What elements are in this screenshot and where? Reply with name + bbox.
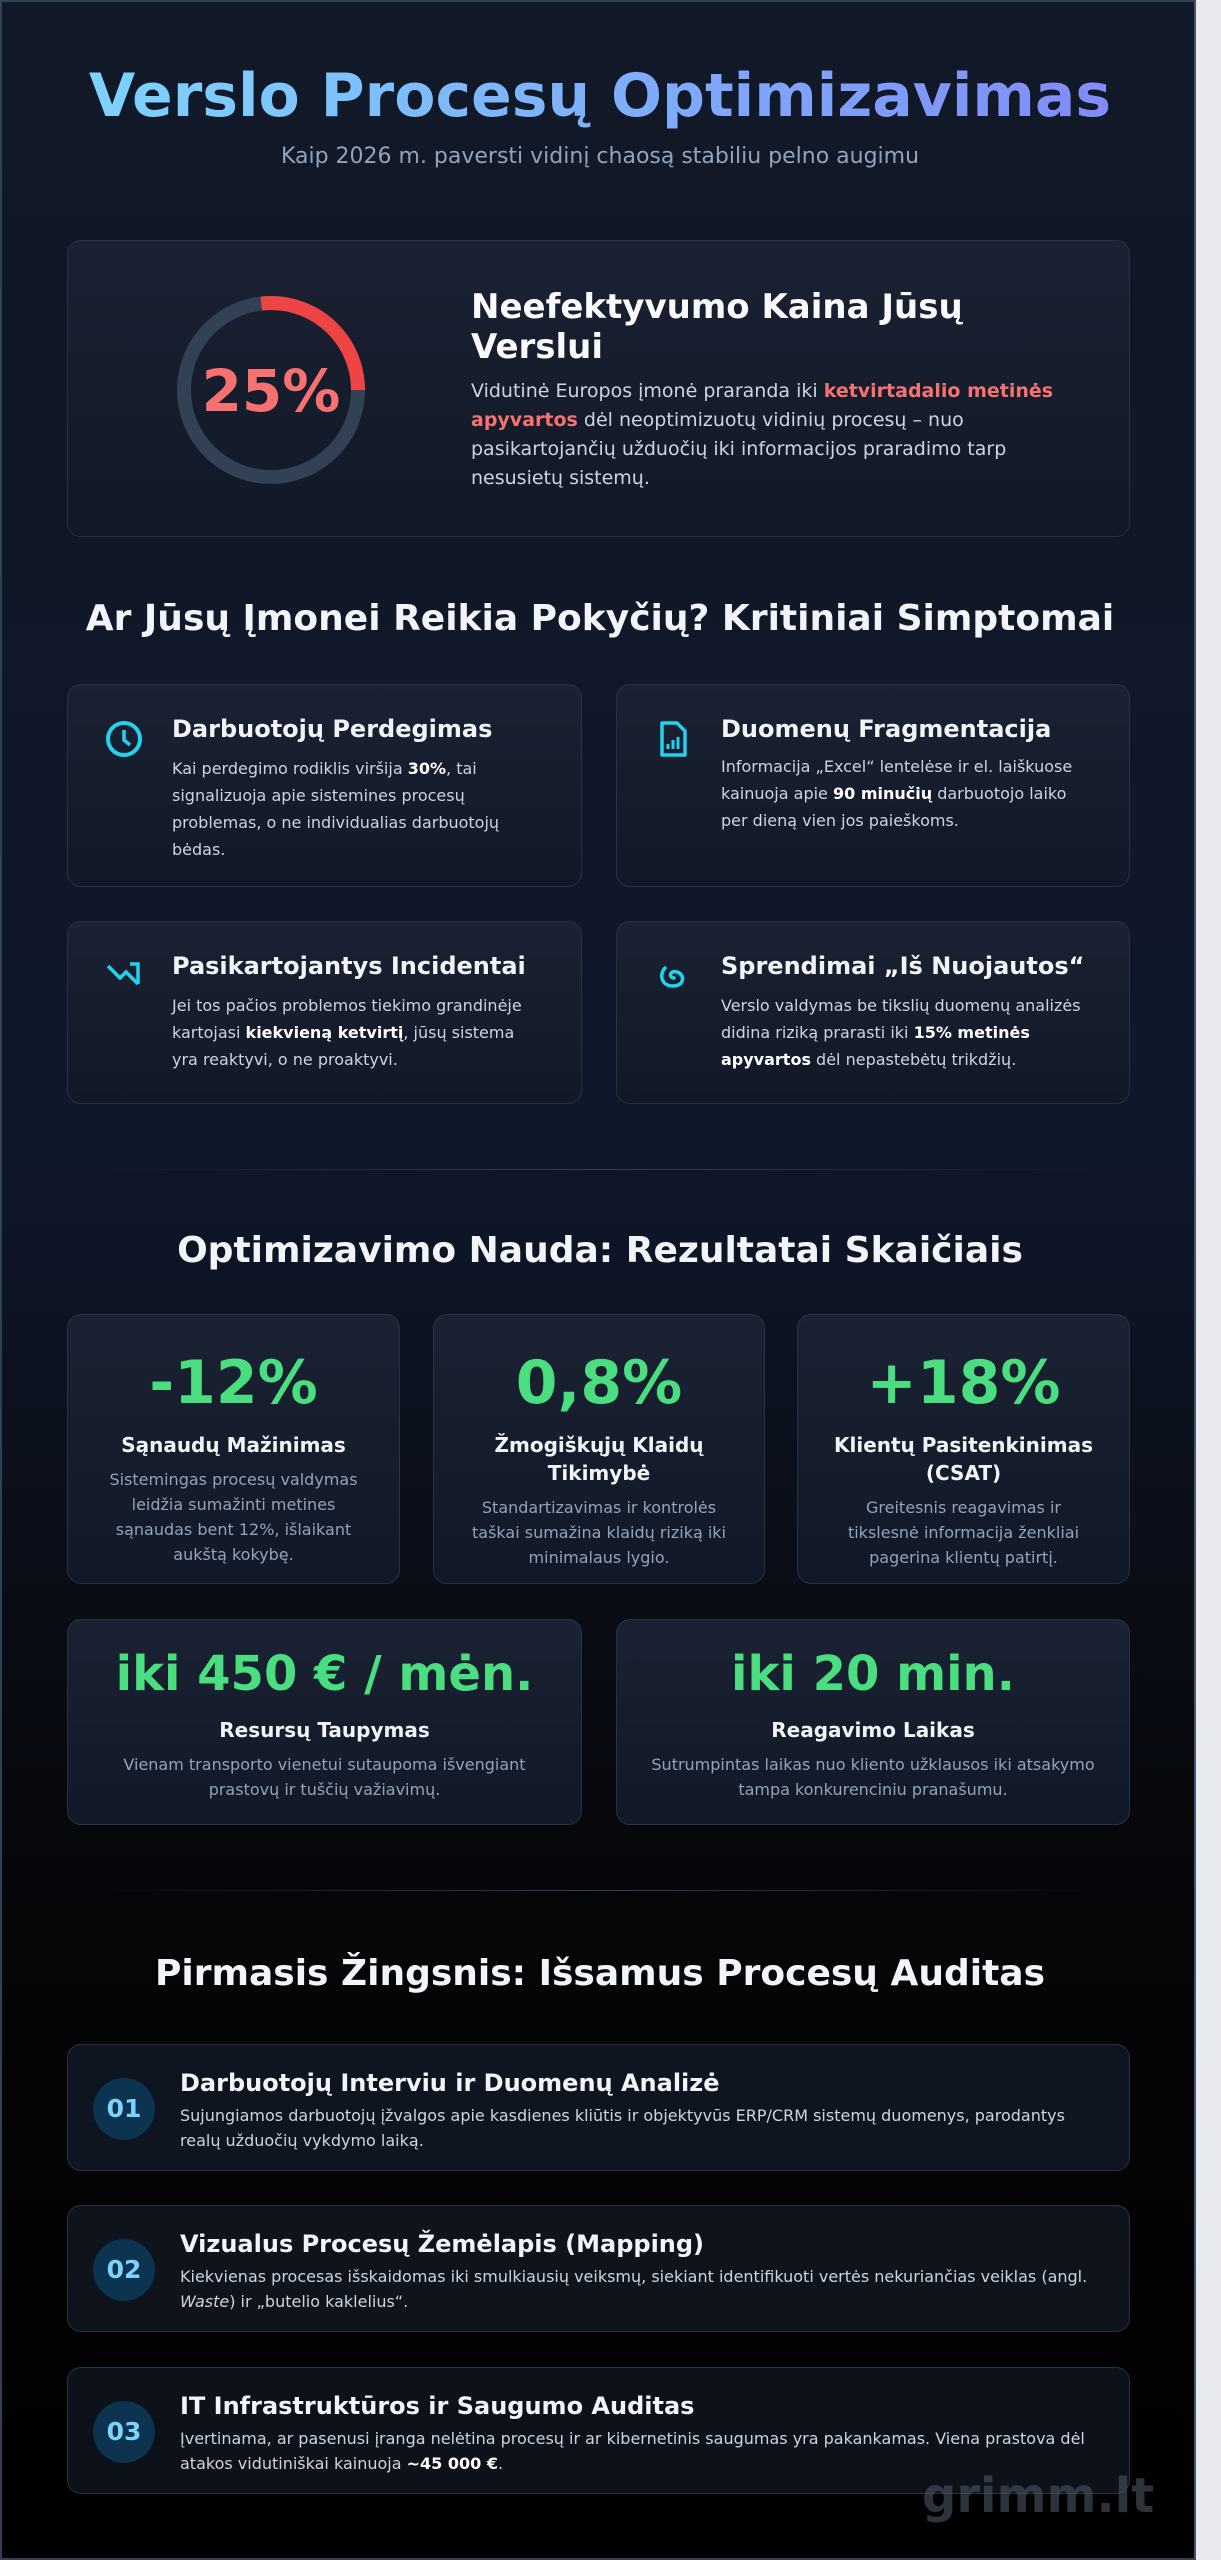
panel: data fragmentation: Duomenų Fragmentacija bbox=[721, 715, 1051, 743]
stat: errors: 0,8% bbox=[516, 1348, 682, 1418]
icon: trend down bbox=[106, 962, 140, 986]
panel: data fragmentation: Informacija „Excel“ lentelėse ir el. laiškuose kainuoja apie 90 minučių darbuotojo laiko per dieną vien jos paieškoms. bbox=[721, 757, 1072, 830]
step 03 bbox=[67, 2367, 1130, 2494]
stat: costs bbox=[67, 1314, 400, 1584]
text: Vidutinė Europos įmonė praranda iki ketvirtadalio metinės apyvartos dėl neoptimizuotų vidinių procesų – nuo pasikartojančių užduočių iki informacijos praradimo tarp nesusietų sistemų. bbox=[471, 380, 1053, 489]
step 01: 01 bbox=[107, 2094, 141, 2123]
heading: benefits: Optimizavimo Nauda: Rezultatai Skaičiais bbox=[177, 1230, 1023, 1271]
stat: resources bbox=[67, 1619, 582, 1825]
stat: CSAT: +18% bbox=[867, 1348, 1060, 1418]
stat: resources: Resursų Taupymas bbox=[219, 1718, 430, 1742]
step 02 bbox=[67, 2205, 1130, 2332]
panel: gut decisions: Verslo valdymas be tikslių duomenų analizės didina riziką prarasti iki 15% metinės apyvartos dėl nepastebėtų trikdžių. bbox=[721, 996, 1081, 1069]
panel: cost of inefficiency bbox=[67, 240, 1130, 537]
stat: response time: Sutrumpintas laikas nuo kliento užklausos iki atsakymo tampa konkurenciniu pranašumu. bbox=[651, 1755, 1095, 1799]
icon: spiral bbox=[660, 966, 684, 988]
stat: costs: Sistemingas procesų valdymas leidžia sumažinti metines sąnaudas bent 12%, išlaikant aukštą kokybę. bbox=[109, 1470, 358, 1564]
stat: errors: Žmogiškųjų Klaidų Tikimybė bbox=[494, 1433, 704, 1485]
panel: data fragmentation bbox=[616, 684, 1130, 887]
stat: errors: Standartizavimas ir kontrolės taškai sumažina klaidų riziką iki minimalaus lygio. bbox=[472, 1498, 726, 1567]
stat: CSAT: Greitesnis reagavimas ir tikslesnė informacija ženkliai pagerina klientų patirtį. bbox=[848, 1498, 1079, 1567]
step 02: 02 bbox=[107, 2255, 141, 2284]
step 03: 03 bbox=[107, 2417, 141, 2446]
stat: response time: iki 20 min. bbox=[731, 1646, 1015, 1702]
ring chart 25% bbox=[177, 296, 365, 484]
step 03: Įvertinama, ar pasenusi įranga nelėtina procesų ir ar kibernetinis saugumas yra pakankamas. Viena prastova dėl atakos vidutiniškai kainuoja ~45 000 €. bbox=[180, 2429, 1085, 2473]
step 03: IT Infrastruktūros ir Saugumo Auditas bbox=[180, 2392, 694, 2420]
stat: resources: iki 450 € / mėn. bbox=[116, 1646, 533, 1702]
step 01: Sujungiamos darbuotojų įžvalgos apie kasdienes kliūtis ir objektyvūs ERP/CRM sistemų duomenys, parodantys realų užduočių vykdymo laiką. bbox=[180, 2106, 1065, 2150]
panel: gut decisions bbox=[616, 921, 1130, 1104]
icon: clock bbox=[106, 721, 142, 757]
subtitle: Kaip 2026 m. paversti vidinį chaosą stabiliu pelno augimu bbox=[281, 144, 919, 169]
panel: recurring incidents: Jei tos pačios problemos tiekimo grandinėje kartojasi kiekvieną ketvirtį, jūsų sistema yra reaktyvi, o ne proaktyvi. bbox=[172, 996, 522, 1069]
step 01 bbox=[67, 2044, 1130, 2171]
stat: costs: Sąnaudų Mažinimas bbox=[121, 1433, 346, 1457]
stat: errors bbox=[433, 1314, 765, 1584]
panel: burnout: Kai perdegimo rodiklis viršija 30%, tai signalizuoja apie sistemines procesų problemas, o ne individualias darbuotojų bėdas. bbox=[172, 759, 499, 859]
panel: gut decisions: Sprendimai „Iš Nuojautos“ bbox=[721, 952, 1084, 980]
heading: Neefektyvumo Kaina Jūsų Verslui bbox=[471, 287, 963, 367]
stat: response time: Reagavimo Laikas bbox=[771, 1718, 975, 1742]
panel: recurring incidents: Pasikartojantys Incidentai bbox=[172, 952, 526, 980]
watermark: grimm.lt bbox=[922, 2468, 1154, 2524]
stat: CSAT bbox=[797, 1314, 1130, 1584]
stat: costs: -12% bbox=[149, 1348, 318, 1418]
panel: recurring incidents bbox=[67, 921, 582, 1104]
panel: burnout: Darbuotojų Perdegimas bbox=[172, 715, 492, 743]
panel: burnout bbox=[67, 684, 582, 887]
heading: first step: Pirmasis Žingsnis: Išsamus Procesų Auditas bbox=[155, 1953, 1045, 1994]
icon: document chart bbox=[660, 721, 687, 757]
step 01: Darbuotojų Interviu ir Duomenų Analizė bbox=[180, 2069, 720, 2097]
stat: response time bbox=[616, 1619, 1130, 1825]
stat: resources: Vienam transporto vienetui sutaupoma išvengiant prastovų ir tuščių važiavimų. bbox=[123, 1755, 526, 1799]
heading: symptoms: Ar Jūsų Įmonei Reikia Pokyčių? Kritiniai Simptomai bbox=[86, 598, 1114, 639]
step 02: Vizualus Procesų Žemėlapis (Mapping) bbox=[180, 2230, 704, 2258]
title: Verslo Procesų Optimizavimas bbox=[89, 61, 1111, 131]
step 02: Kiekvienas procesas išskaidomas iki smulkiausių veiksmų, siekiant identifikuoti vertės nekuriančias veiklas (angl. Waste) ir „butelio kaklelius“. bbox=[180, 2267, 1087, 2311]
ring chart 25%: 25% bbox=[202, 357, 340, 425]
stat: CSAT: Klientų Pasitenkinimas (CSAT) bbox=[834, 1433, 1093, 1485]
